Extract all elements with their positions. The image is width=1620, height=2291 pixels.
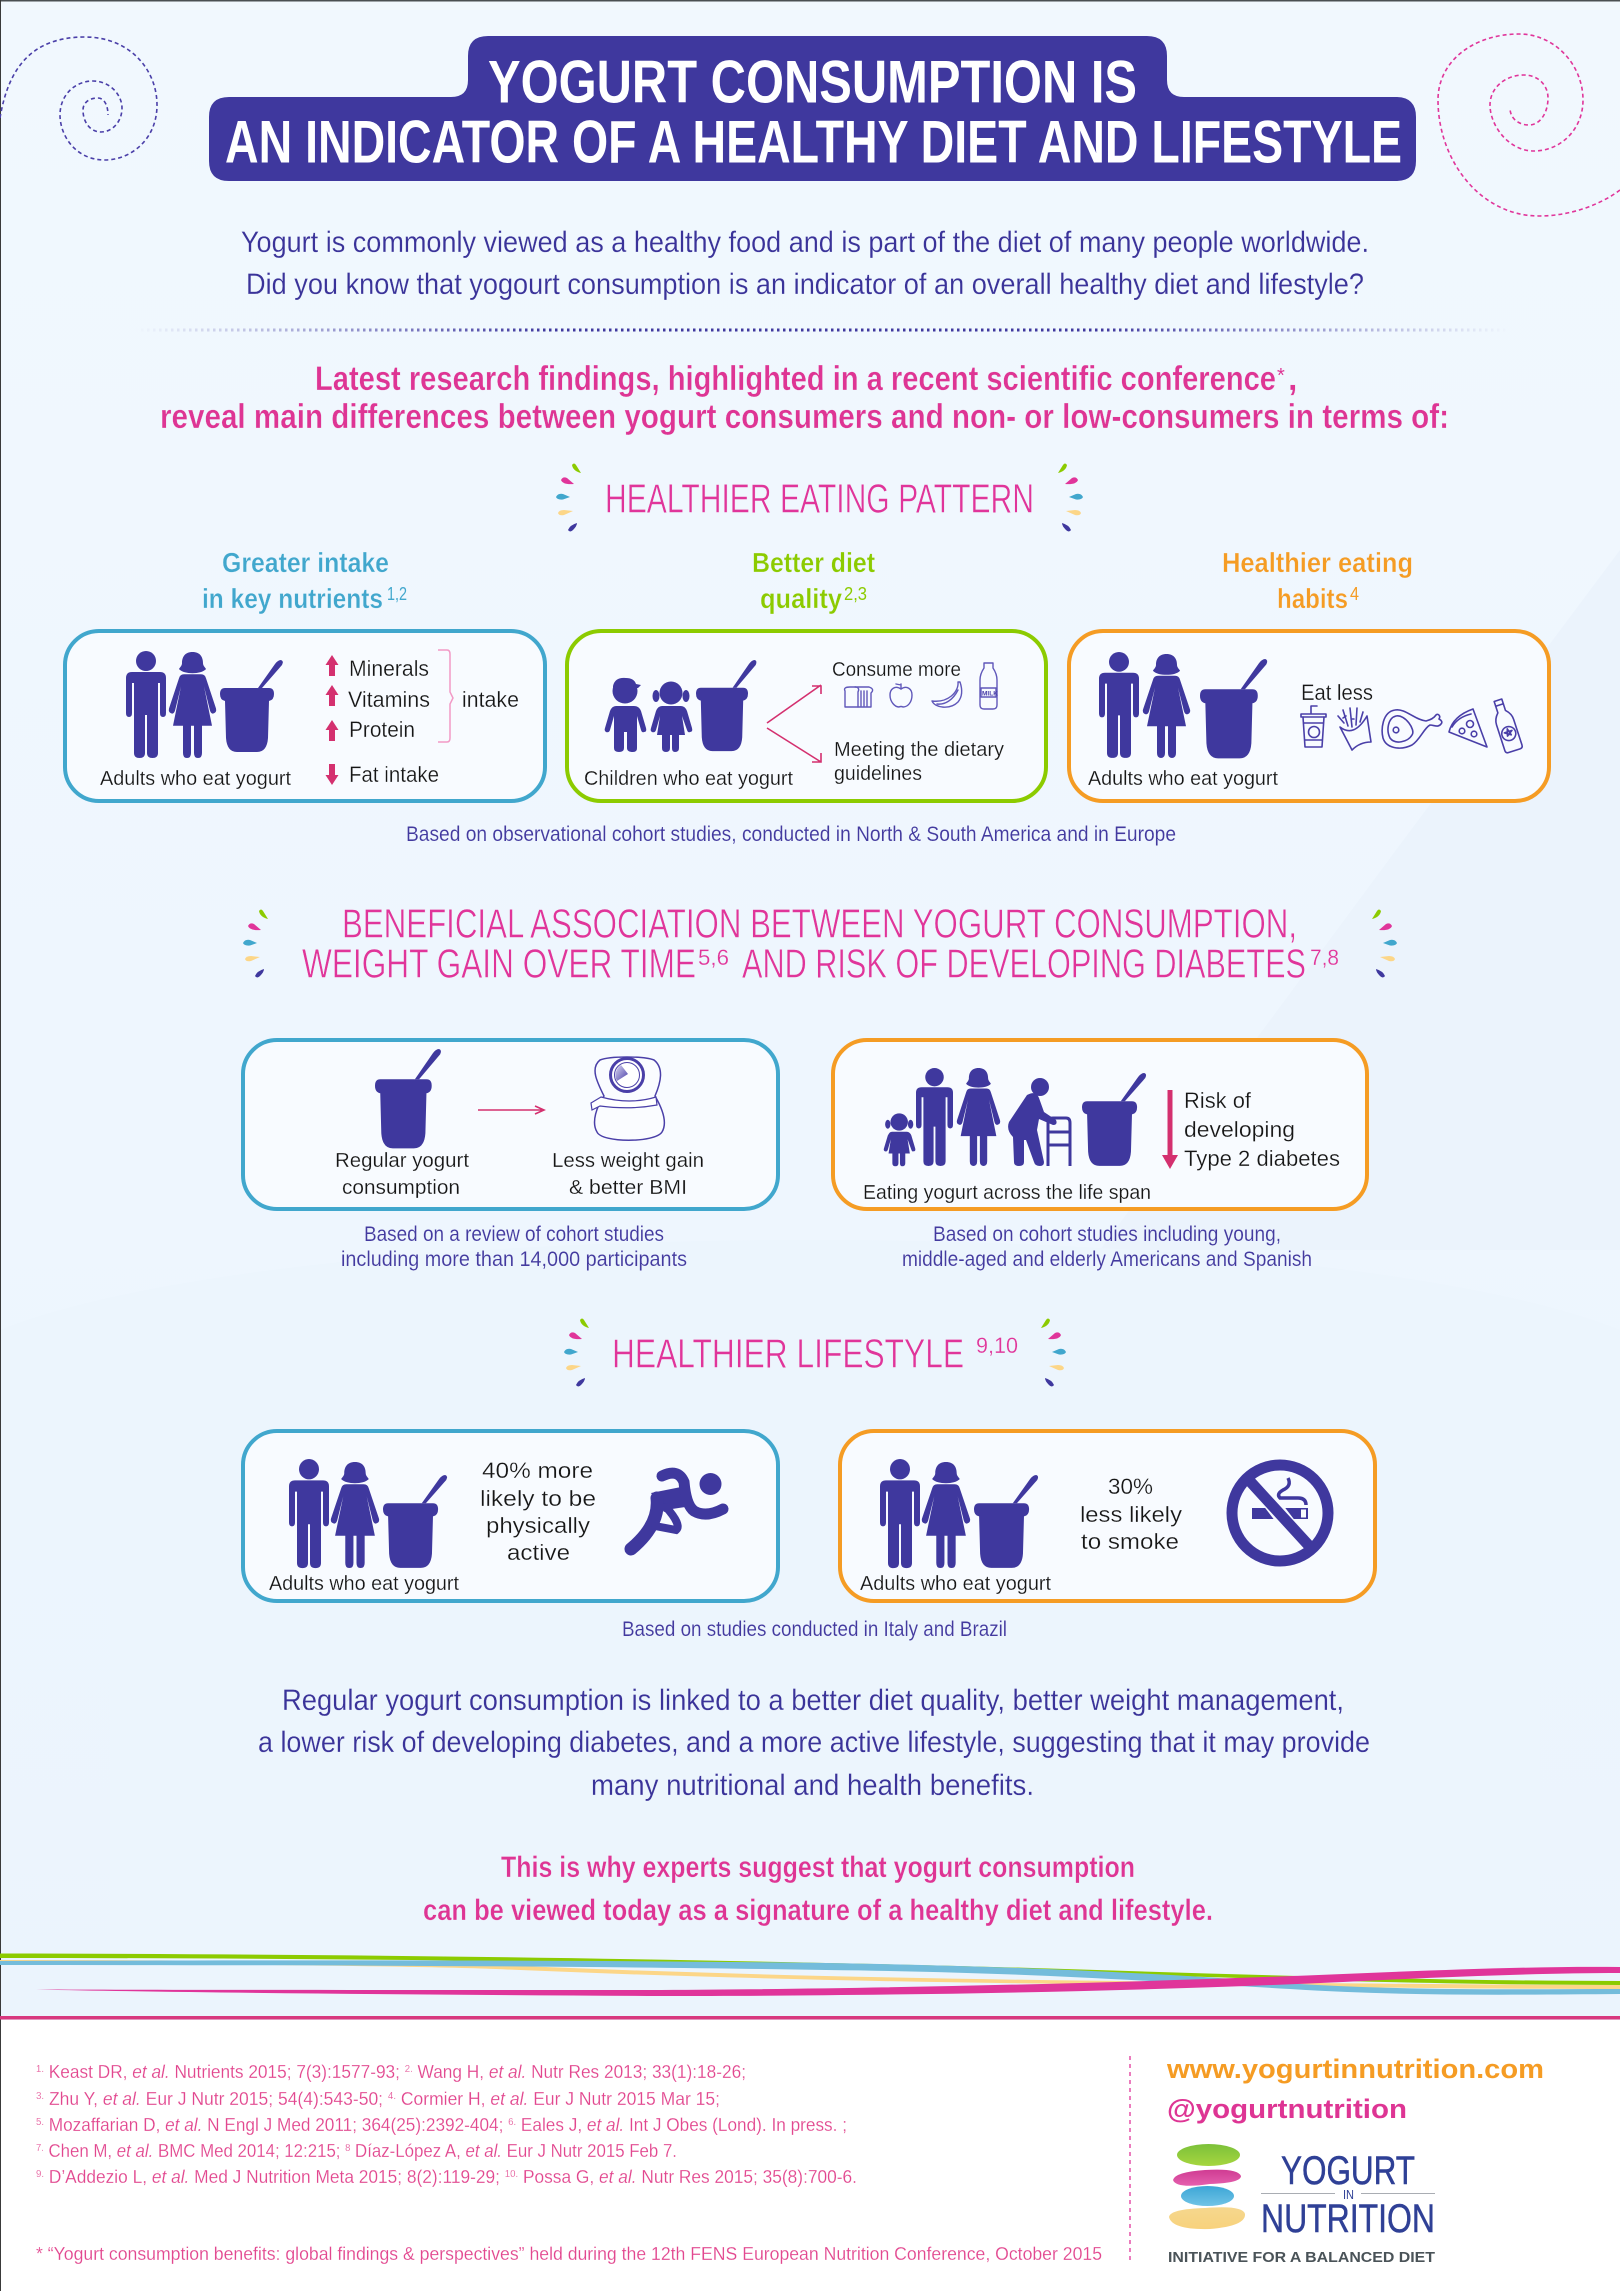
icon: children with yogurt <box>605 660 756 752</box>
references: et al. Int J Obes (Lond). In press. ; <box>587 2115 857 2135</box>
text: 40 percent more <box>480 1458 596 1565</box>
references: Díaz-López A, <box>350 2141 465 2161</box>
panel: healthier eating habits <box>1069 631 1549 801</box>
icon: milk bottle: MILK <box>982 690 998 698</box>
arrow <box>478 1106 544 1114</box>
section heading: healthier lifestyle: 9,10 <box>976 1333 1018 1358</box>
references: 2. <box>405 2064 413 2075</box>
panel: greater intake in key nutrients <box>65 631 545 801</box>
references: 8 <box>345 2143 351 2154</box>
lead heading: * <box>1277 365 1285 387</box>
subheading: greater intake: in key nutrients <box>202 583 383 614</box>
references: 10. <box>505 2169 518 2180</box>
references: et al. BMC Med 2014; 12:215; <box>117 2141 353 2161</box>
label: regular yogurt consumption: Regular yogurt <box>335 1150 469 1172</box>
icon: adults with yogurt <box>1099 652 1267 758</box>
label: less weight gain: & better BMI <box>569 1177 687 1199</box>
decorative ribbons <box>0 1954 1620 2020</box>
note: cohort studies americans and spanish: Based on cohort studies including young, <box>933 1223 1281 1246</box>
references: Keast DR, <box>44 2062 132 2082</box>
references: et al. Nutr Res 2013; 33(1):18-26; <box>489 2062 755 2082</box>
icon: adults with yogurt <box>880 1459 1038 1568</box>
references: 7. <box>36 2143 44 2154</box>
conclusion highlight: can be viewed today as a signature of a healthy diet and lifestyle. <box>423 1894 1213 1927</box>
references: Possa G, <box>518 2167 599 2187</box>
icon: apple <box>890 684 912 707</box>
website link: www.yogurtinnutrition.com <box>1166 2054 1544 2084</box>
section heading: beneficial association: AND RISK OF DEVELOPING DIABETES <box>742 940 1306 986</box>
panel: diabetes risk <box>833 1040 1367 1209</box>
references: et al. N Engl J Med 2011; 364(25):2392-404; <box>165 2115 517 2135</box>
section heading: beneficial association: 7,8 <box>1310 945 1339 970</box>
references: et al. Eur J Nutr 2015 Mar 15; <box>490 2089 725 2109</box>
label: adults who eat yogurt: Adults who eat yogurt <box>1088 768 1278 790</box>
references: et al. Eur J Nutr 2015; 54(4):543-50; <box>103 2089 390 2109</box>
footnote: conference: * “Yogurt consumption benefits: global findings & perspectives” held during the 12th FENS European Nutrition Conference, October 2015 <box>36 2244 1102 2264</box>
section heading: beneficial association: BENEFICIAL ASSOCIATION BETWEEN YOGURT CONSUMPTION, <box>342 900 1297 946</box>
text: 40 percent more: physically <box>486 1513 590 1538</box>
subheading: healthier eating habits: habits <box>1277 583 1348 614</box>
logo blobs <box>1169 2144 1245 2229</box>
label: regular yogurt consumption <box>335 1150 469 1199</box>
references: 9. <box>36 2169 44 2180</box>
social handle: @yogurtnutrition <box>1167 2094 1407 2124</box>
references: et al. Nutrients 2015; 7(3):1577-93; <box>132 2062 410 2082</box>
section heading: beneficial association: WEIGHT GAIN OVER TIME <box>302 940 696 986</box>
label: adults who eat yogurt: Adults who eat yogurt <box>269 1573 459 1595</box>
decorative spiral: right pink <box>1438 34 1620 216</box>
icon: pizza <box>1449 709 1487 747</box>
text: 30 percent less <box>1080 1474 1182 1554</box>
references: Wang H, <box>413 2062 489 2082</box>
nutrient list with arrows: Protein <box>349 717 415 742</box>
subheading: better diet quality: Better diet <box>752 547 875 578</box>
references: D’Addezio L, <box>44 2167 152 2187</box>
icon: adults with yogurt <box>126 651 283 758</box>
label: less weight gain: Less weight gain <box>552 1150 704 1172</box>
text: meeting the dietary guidelines: guidelines <box>834 763 922 785</box>
subheading: greater intake: 1,2 <box>387 584 407 604</box>
icon: bottle <box>1489 697 1523 753</box>
conclusion text <box>258 1684 1370 1802</box>
text: eat less: Eat less <box>1301 680 1373 705</box>
icon: soda cup <box>1301 706 1326 747</box>
text: 30 percent less: 30% <box>1108 1474 1153 1499</box>
intro text: Did you know that yogourt consumption is an indicator of an overall healthy diet and lifestyle? <box>246 268 1364 301</box>
logo wordmark: YOGURT <box>1281 2149 1415 2193</box>
section heading: beneficial association: 5,6 <box>698 945 729 970</box>
section heading: healthier lifestyle: HEALTHIER LIFESTYLE <box>612 1330 964 1376</box>
text: 40 percent more: likely to be <box>480 1486 596 1511</box>
conclusion text: a lower risk of developing diabetes, and a more active lifestyle, suggesting that it may provide <box>258 1726 1370 1759</box>
label: less weight gain <box>552 1150 704 1199</box>
lead heading: , <box>1288 360 1297 398</box>
arrow: risk down <box>1162 1090 1178 1169</box>
subheading: greater intake: Greater intake <box>222 547 389 578</box>
logo tagline: INITIATIVE FOR A BALANCED DIET <box>1168 2250 1435 2266</box>
text: risk of type 2 diabetes: Type 2 diabetes <box>1184 1146 1340 1171</box>
icon: ham <box>1382 710 1442 748</box>
nutrient list with arrows: Minerals <box>349 656 429 681</box>
label: regular yogurt consumption: consumption <box>342 1177 460 1199</box>
text: risk of type 2 diabetes: developing <box>1184 1117 1295 1142</box>
text: risk of type 2 diabetes <box>1184 1088 1340 1171</box>
subheading: better diet quality: 2,3 <box>844 584 867 604</box>
logo wordmark <box>1261 2149 1435 2241</box>
note: review of cohort studies: including more than 14,000 participants <box>341 1248 687 1271</box>
decorative spiral: left indigo <box>0 37 157 160</box>
conclusion highlight <box>423 1851 1213 1927</box>
text: 30 percent less: less likely <box>1080 1502 1182 1527</box>
text: 30 percent less: to smoke <box>1081 1529 1179 1554</box>
subheading: healthier eating habits <box>1222 547 1413 614</box>
icon: family across life span with yogurt <box>884 1068 1146 1166</box>
icon: milk bottle <box>980 663 998 709</box>
text: 40 percent more: active <box>507 1540 570 1565</box>
icon: no smoking <box>1232 1465 1328 1561</box>
icon: banana <box>932 682 962 707</box>
label: children who eat yogurt: Children who eat yogurt <box>584 768 793 790</box>
panel: better diet quality <box>567 631 1046 801</box>
arrows: branching <box>767 685 821 762</box>
title: YOGURT CONSUMPTION IS <box>488 48 1137 116</box>
nutrient list with arrows: Fat intake <box>349 762 439 787</box>
logo wordmark: IN <box>1343 2187 1354 2202</box>
references: et al. Med J Nutrition Meta 2015; 8(2):119-29; <box>152 2167 512 2187</box>
icon: fries <box>1338 708 1371 750</box>
icon: weighing scale with tape <box>591 1057 664 1140</box>
label: adults who eat yogurt: Adults who eat yogurt <box>100 768 291 790</box>
nutrient list with arrows: Vitamins <box>348 687 430 712</box>
references: 5. <box>36 2117 44 2128</box>
references: et al. Eur J Nutr 2015 Feb 7. <box>465 2141 689 2161</box>
section heading: healthier lifestyle <box>564 1318 1066 1386</box>
lead heading: reveal main differences between yogurt consumers and non- or low-consumers in terms of: <box>160 398 1449 436</box>
note: italy and brazil: Based on studies conducted in Italy and Brazil <box>622 1618 1007 1641</box>
references: 3. <box>36 2091 44 2102</box>
note: review of cohort studies: Based on a review of cohort studies <box>364 1223 664 1246</box>
lead heading: Latest research findings, highlighted in a recent scientific conference <box>315 360 1276 398</box>
intro text: Yogurt is commonly viewed as a healthy food and is part of the diet of many people worldwide. <box>241 226 1369 259</box>
lead heading <box>160 360 1449 436</box>
text: 40 percent more: 40% more <box>482 1458 593 1483</box>
references: 6. <box>508 2117 516 2128</box>
references: 1. <box>36 2064 44 2075</box>
logo wordmark: NUTRITION <box>1261 2197 1435 2241</box>
title <box>209 36 1416 181</box>
subheading: greater intake <box>202 547 407 614</box>
logo: yogurt in nutrition <box>1168 2144 1435 2266</box>
panel: smoking <box>840 1431 1375 1601</box>
conclusion text: Regular yogurt consumption is linked to a better diet quality, better weight management, <box>282 1684 1344 1717</box>
note: cohort studies americans and spanish: middle-aged and elderly Americans and Spanish <box>902 1248 1312 1271</box>
icon: yogurt cup <box>375 1049 441 1148</box>
panel: weight gain <box>243 1040 778 1209</box>
section heading: healthier eating pattern <box>556 464 1083 532</box>
text: meeting the dietary guidelines: Meeting the dietary <box>834 739 1004 761</box>
references: Eales J, <box>516 2115 587 2135</box>
text: risk of type 2 diabetes: Risk of <box>1184 1088 1252 1113</box>
nutrient list with arrows <box>326 650 519 787</box>
conclusion highlight: This is why experts suggest that yogurt consumption <box>501 1851 1135 1884</box>
subheading: healthier eating habits: Healthier eating <box>1222 547 1413 578</box>
note: review of cohort studies <box>341 1223 687 1271</box>
conclusion text: many nutritional and health benefits. <box>591 1769 1034 1802</box>
label: eating yogurt across the life span: Eating yogurt across the life span <box>863 1182 1151 1204</box>
references: Cormier H, <box>396 2089 490 2109</box>
label: adults who eat yogurt: Adults who eat yogurt <box>860 1573 1051 1595</box>
references: Mozaffarian D, <box>44 2115 165 2135</box>
subheading: better diet quality: quality <box>760 583 842 614</box>
text: consume more: Consume more <box>832 659 961 681</box>
icon: adults with yogurt <box>289 1459 447 1568</box>
note: observational cohort studies: Based on observational cohort studies, conducted in North & South America and in Europe <box>406 823 1176 846</box>
intro text <box>241 226 1369 301</box>
section heading: beneficial association <box>243 900 1397 986</box>
references <box>36 2062 857 2187</box>
references: Chen M, <box>44 2141 117 2161</box>
subheading: healthier eating habits: 4 <box>1350 584 1359 604</box>
subheading: better diet quality <box>752 547 875 614</box>
panel: physical activity <box>243 1431 778 1601</box>
icon: bread <box>845 687 873 707</box>
references: Zhu Y, <box>44 2089 103 2109</box>
note: cohort studies americans and spanish <box>902 1223 1312 1271</box>
references: et al. Nutr Res 2015; 35(8):700-6. <box>599 2167 866 2187</box>
references: 4. <box>388 2091 396 2102</box>
text: meeting the dietary guidelines <box>834 739 1004 785</box>
section heading: healthier eating pattern: HEALTHIER EATING PATTERN <box>605 476 1034 522</box>
nutrient list with arrows: intake <box>462 687 519 712</box>
icon: runner <box>631 1473 723 1549</box>
